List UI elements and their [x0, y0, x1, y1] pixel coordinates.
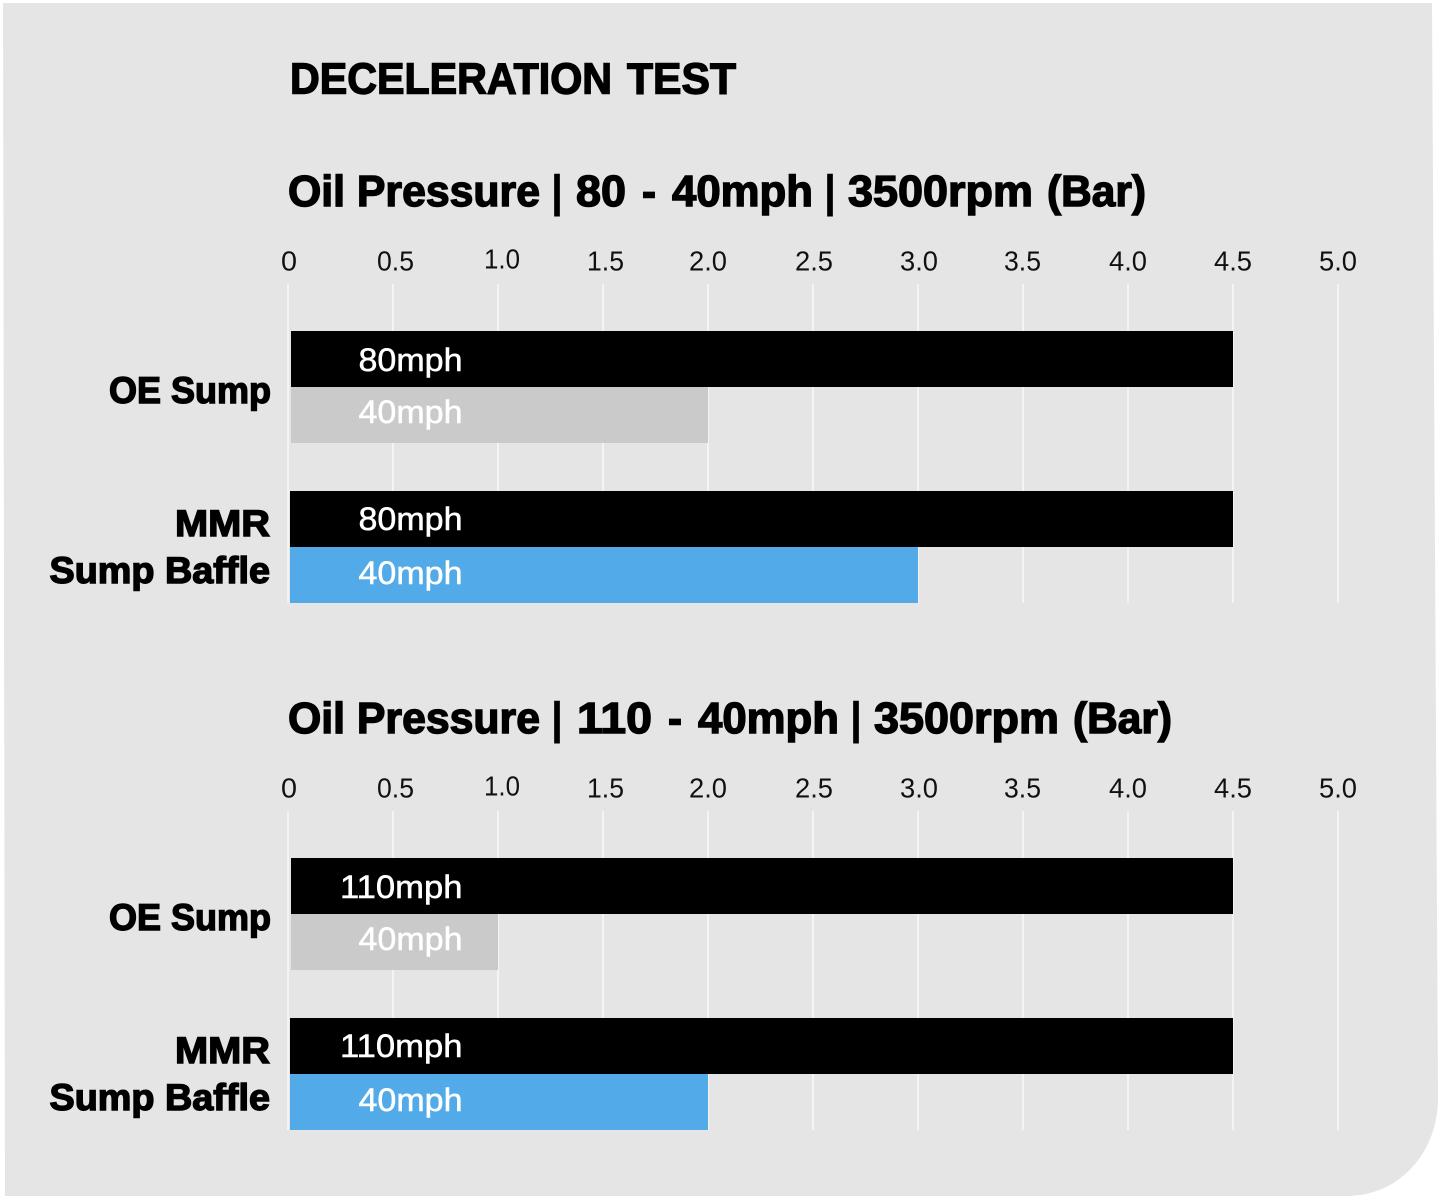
bar: MMR 40mph: 40mph — [358, 1082, 462, 1118]
chart heading: | — [552, 167, 562, 217]
axis labels: 2.5 — [795, 772, 833, 804]
chart heading: - — [668, 694, 682, 743]
axis labels: 4.5 — [1214, 772, 1252, 804]
bar: OE Sump 40mph: 40mph — [358, 921, 462, 957]
axis labels: 5.0 — [1319, 246, 1357, 276]
grid lines — [288, 284, 1338, 603]
row label: MMR Sump Baffle: Sump Baffle — [50, 550, 270, 591]
bar: MMR 40mph — [290, 547, 918, 603]
bar: MMR 80mph: 80mph — [358, 501, 462, 537]
title: TEST — [627, 54, 736, 104]
chart: 110 to 40 mph — [50, 694, 1357, 1130]
chart heading — [288, 694, 1172, 744]
bar: MMR 40mph — [290, 1074, 708, 1130]
axis labels: 4.0 — [1109, 246, 1147, 276]
axis labels: 3.0 — [900, 246, 938, 276]
axis labels: 0.5 — [377, 246, 414, 276]
axis labels: 0 — [281, 772, 297, 804]
chart heading: 40mph — [698, 694, 839, 743]
chart: 80 to 40 mph — [50, 167, 1357, 603]
row label: OE Sump: OE Sump — [109, 897, 271, 938]
axis labels — [281, 770, 1357, 804]
chart heading: 80 — [576, 167, 626, 216]
chart heading: (Bar) — [1047, 167, 1146, 216]
axis labels: 3.5 — [1004, 246, 1041, 276]
bar: OE Sump 40mph — [291, 914, 498, 970]
row label: MMR Sump Baffle: Sump Baffle — [50, 1077, 270, 1118]
title: DECELERATION — [290, 54, 612, 104]
bar: OE Sump 40mph: 40mph — [358, 394, 462, 430]
axis labels: 1.0 — [484, 770, 520, 802]
axis labels: 2.0 — [689, 246, 727, 276]
axis labels: 3.5 — [1004, 772, 1041, 804]
axis labels: 0 — [281, 246, 297, 276]
axis labels: 1.5 — [587, 772, 624, 804]
chart heading: | — [851, 694, 861, 744]
row label: MMR Sump Baffle: MMR — [175, 1030, 270, 1071]
row label: MMR Sump Baffle — [50, 503, 270, 591]
row label: MMR Sump Baffle: MMR — [175, 503, 270, 544]
axis labels — [281, 244, 1357, 276]
chart heading: 110 — [577, 694, 652, 743]
axis labels: 1.0 — [484, 244, 520, 274]
axis labels: 4.0 — [1109, 772, 1147, 804]
bar: MMR 80mph — [290, 491, 1233, 547]
chart heading — [288, 167, 1146, 217]
chart heading: Oil Pressure — [288, 167, 540, 216]
bar: OE Sump 80mph: 80mph — [358, 342, 462, 378]
axis labels: 1.5 — [587, 246, 624, 276]
chart heading: | — [825, 167, 835, 217]
chart heading: - — [642, 167, 656, 216]
bar: MMR 110mph — [290, 1018, 1233, 1074]
axis labels: 2.0 — [689, 772, 727, 804]
bar: OE Sump 110mph — [291, 858, 1233, 914]
chart heading: Oil Pressure — [288, 694, 540, 743]
row label: OE Sump: OE Sump — [109, 370, 271, 411]
grid lines — [288, 811, 1338, 1130]
axis labels: 4.5 — [1214, 246, 1252, 276]
bar: OE Sump 110mph: 110mph — [340, 869, 462, 905]
axis labels: 5.0 — [1319, 772, 1357, 804]
chart heading: (Bar) — [1073, 694, 1172, 743]
axis labels: 2.5 — [795, 246, 833, 276]
chart heading: 3500rpm — [874, 694, 1059, 743]
chart heading: | — [552, 694, 562, 744]
axis labels: 0.5 — [377, 772, 414, 804]
bar: MMR 40mph: 40mph — [358, 555, 462, 591]
chart heading: 40mph — [672, 167, 813, 216]
bar: OE Sump 80mph — [291, 331, 1233, 387]
row label: MMR Sump Baffle — [50, 1030, 270, 1118]
bar: OE Sump 40mph — [291, 387, 708, 443]
chart heading: 3500rpm — [848, 167, 1033, 216]
bar: MMR 110mph: 110mph — [340, 1028, 462, 1064]
axis labels: 3.0 — [900, 772, 938, 804]
